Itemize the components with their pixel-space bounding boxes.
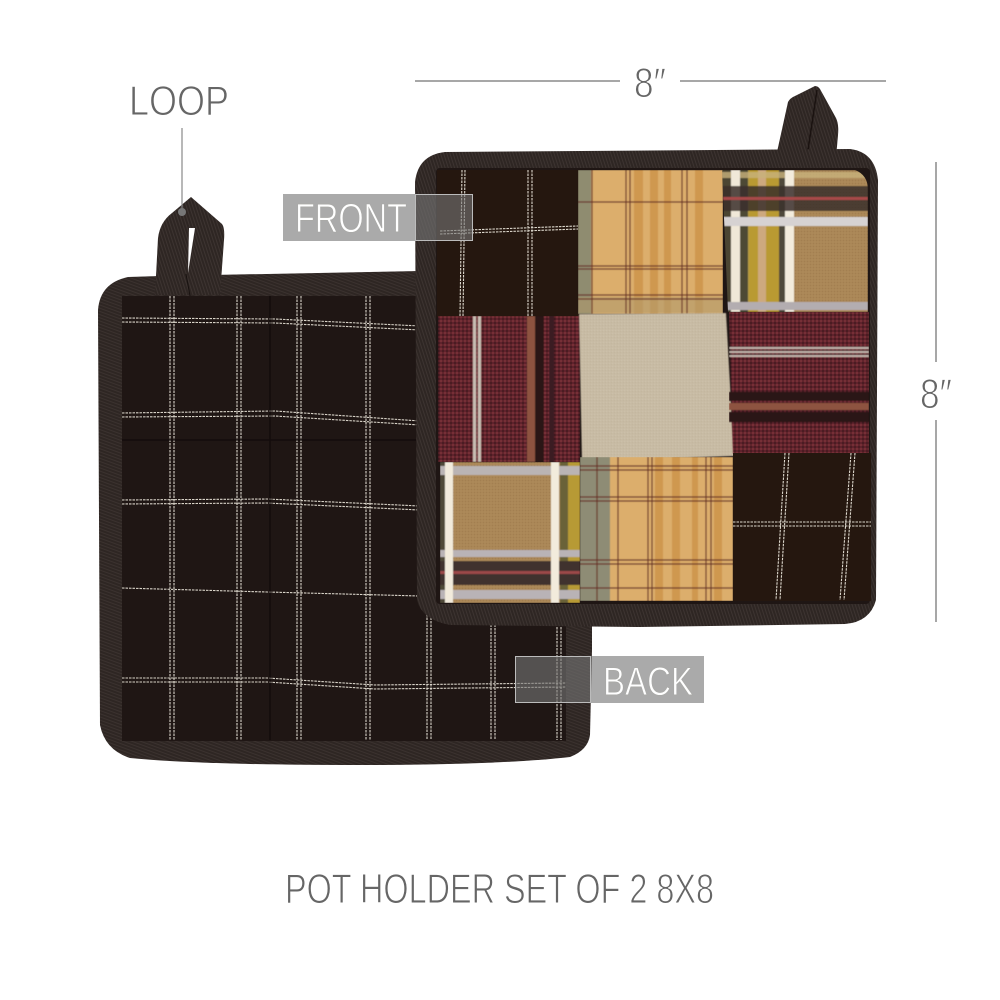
patch: top middle tan plaid bbox=[578, 170, 723, 314]
width dimension: 8″ bbox=[634, 59, 666, 106]
patch: bottom middle tan plaid bbox=[580, 457, 733, 601]
front loop bbox=[777, 86, 838, 158]
back pot holder bbox=[98, 197, 592, 765]
patch: top left dark bbox=[437, 170, 579, 317]
loop callout bbox=[129, 77, 229, 216]
loop callout: LOOP bbox=[129, 77, 229, 124]
patch: middle right red plaid bbox=[729, 312, 869, 454]
patch: top right plaid bbox=[722, 170, 868, 312]
front backing edge bbox=[436, 168, 870, 604]
patch: bottom right dark bbox=[733, 453, 871, 601]
front binding bbox=[415, 149, 878, 627]
back loop bbox=[155, 197, 224, 296]
patch: middle left red plaid bbox=[438, 316, 580, 462]
height dimension: 8″ bbox=[920, 370, 952, 417]
patch: bottom left plaid bbox=[440, 462, 580, 603]
front pot holder bbox=[415, 86, 878, 627]
back quilted fabric bbox=[122, 296, 566, 741]
front label: FRONT bbox=[295, 195, 407, 241]
back binding bbox=[98, 271, 592, 765]
back label bbox=[515, 656, 704, 704]
patch: center linen bbox=[579, 313, 734, 461]
product title: POT HOLDER SET OF 2 8X8 bbox=[285, 865, 714, 912]
back label: BACK bbox=[603, 660, 693, 704]
infographic: pot holder set bbox=[98, 68, 951, 903]
